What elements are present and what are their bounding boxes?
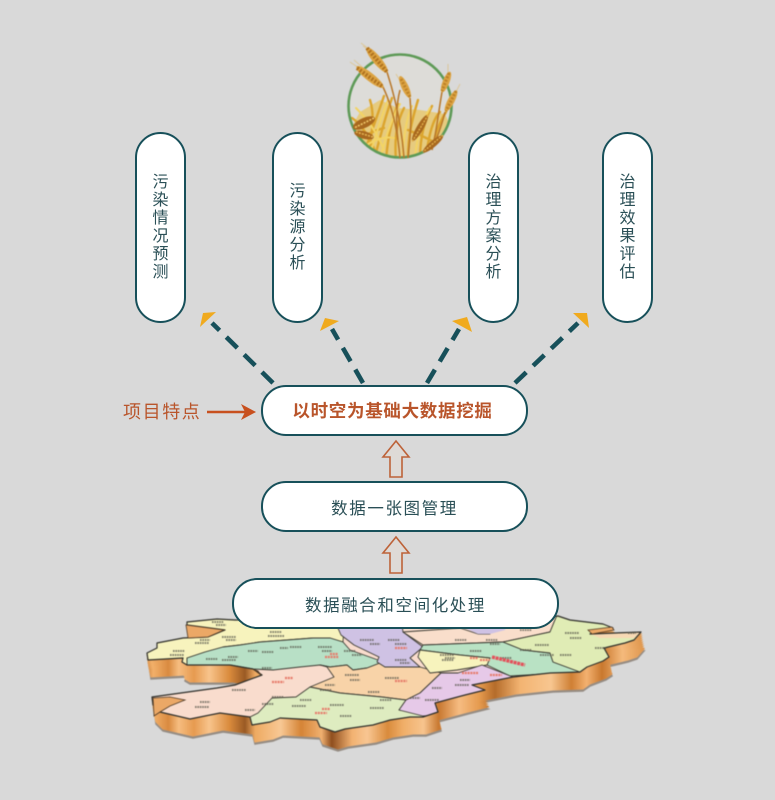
pill: 治理效果评估: 理 bbox=[619, 192, 636, 208]
arrow: dashed to 治理方案分析 bbox=[427, 317, 472, 383]
arrow: hollow up arrow lower bbox=[383, 537, 409, 573]
pill: 以时空为基础大数据挖掘: 以时空为基础大数据挖掘 bbox=[292, 401, 493, 421]
pill: 数据一张图管理 bbox=[261, 481, 528, 532]
pill: 治理方案分析: 分 bbox=[485, 246, 502, 262]
map top outline bbox=[147, 616, 641, 732]
arrow: dashed to 污染源分析 bbox=[320, 318, 363, 383]
pill: 治理方案分析: 案 bbox=[485, 228, 502, 244]
pill: 数据一张图管理: 数据一张图管理 bbox=[331, 500, 458, 518]
map regions bbox=[147, 616, 639, 732]
map place-name marks bbox=[170, 622, 636, 716]
pill: 数据融合和空间化处理: 数据融合和空间化处理 bbox=[305, 596, 486, 614]
pill: 治理方案分析: 析 bbox=[485, 264, 502, 280]
pill: 污染源分析: 染 bbox=[289, 200, 306, 218]
map side walls bbox=[147, 618, 644, 749]
pill: 污染情况预测: 情 bbox=[152, 210, 168, 226]
pill: 治理效果评估: 效 bbox=[619, 210, 636, 226]
pill: 治理方案分析: 治 bbox=[485, 174, 502, 190]
pill: 数据融合和空间化处理 bbox=[232, 578, 559, 629]
pill: 污染源分析 bbox=[272, 132, 323, 323]
pill: 治理方案分析: 方 bbox=[485, 210, 502, 226]
pill: 污染情况预测: 污 bbox=[152, 174, 168, 190]
pill: 治理方案分析 bbox=[468, 132, 519, 323]
pill: 治理效果评估: 果 bbox=[619, 228, 636, 244]
pill: 污染源分析: 污 bbox=[289, 182, 306, 200]
arrow: dashed to 污染情况预测 bbox=[200, 312, 273, 383]
map cast shadow bbox=[150, 635, 644, 751]
pill: 污染情况预测 bbox=[135, 132, 186, 323]
pill: 治理效果评估 bbox=[602, 132, 653, 323]
icon: 3D province map bbox=[140, 610, 660, 751]
map notch walls bbox=[153, 625, 614, 716]
pill: 污染情况预测: 况 bbox=[152, 228, 168, 244]
pill: 治理效果评估: 治 bbox=[619, 174, 636, 190]
label: 项目特点: 项目特点 bbox=[123, 402, 201, 422]
pill: 污染情况预测: 测 bbox=[152, 264, 168, 280]
pill: 污染源分析: 析 bbox=[289, 254, 306, 272]
pill: 污染情况预测: 染 bbox=[152, 192, 168, 208]
pill: 污染源分析: 源 bbox=[289, 218, 306, 236]
arrow: hollow up arrow upper bbox=[383, 441, 409, 477]
pill: 治理效果评估: 评 bbox=[619, 246, 636, 262]
pill: 污染情况预测: 预 bbox=[152, 246, 168, 262]
pill: 治理方案分析: 理 bbox=[485, 192, 502, 208]
pill: 以时空为基础大数据挖掘 bbox=[261, 385, 528, 436]
icon: wheat in a green circle bbox=[348, 43, 460, 160]
pill: 污染源分析: 分 bbox=[289, 236, 306, 254]
pill: 治理效果评估: 估 bbox=[619, 264, 636, 280]
arrow: dashed to 治理效果评估 bbox=[515, 313, 589, 383]
arrow: orange pointer to highlighted box bbox=[207, 404, 256, 420]
